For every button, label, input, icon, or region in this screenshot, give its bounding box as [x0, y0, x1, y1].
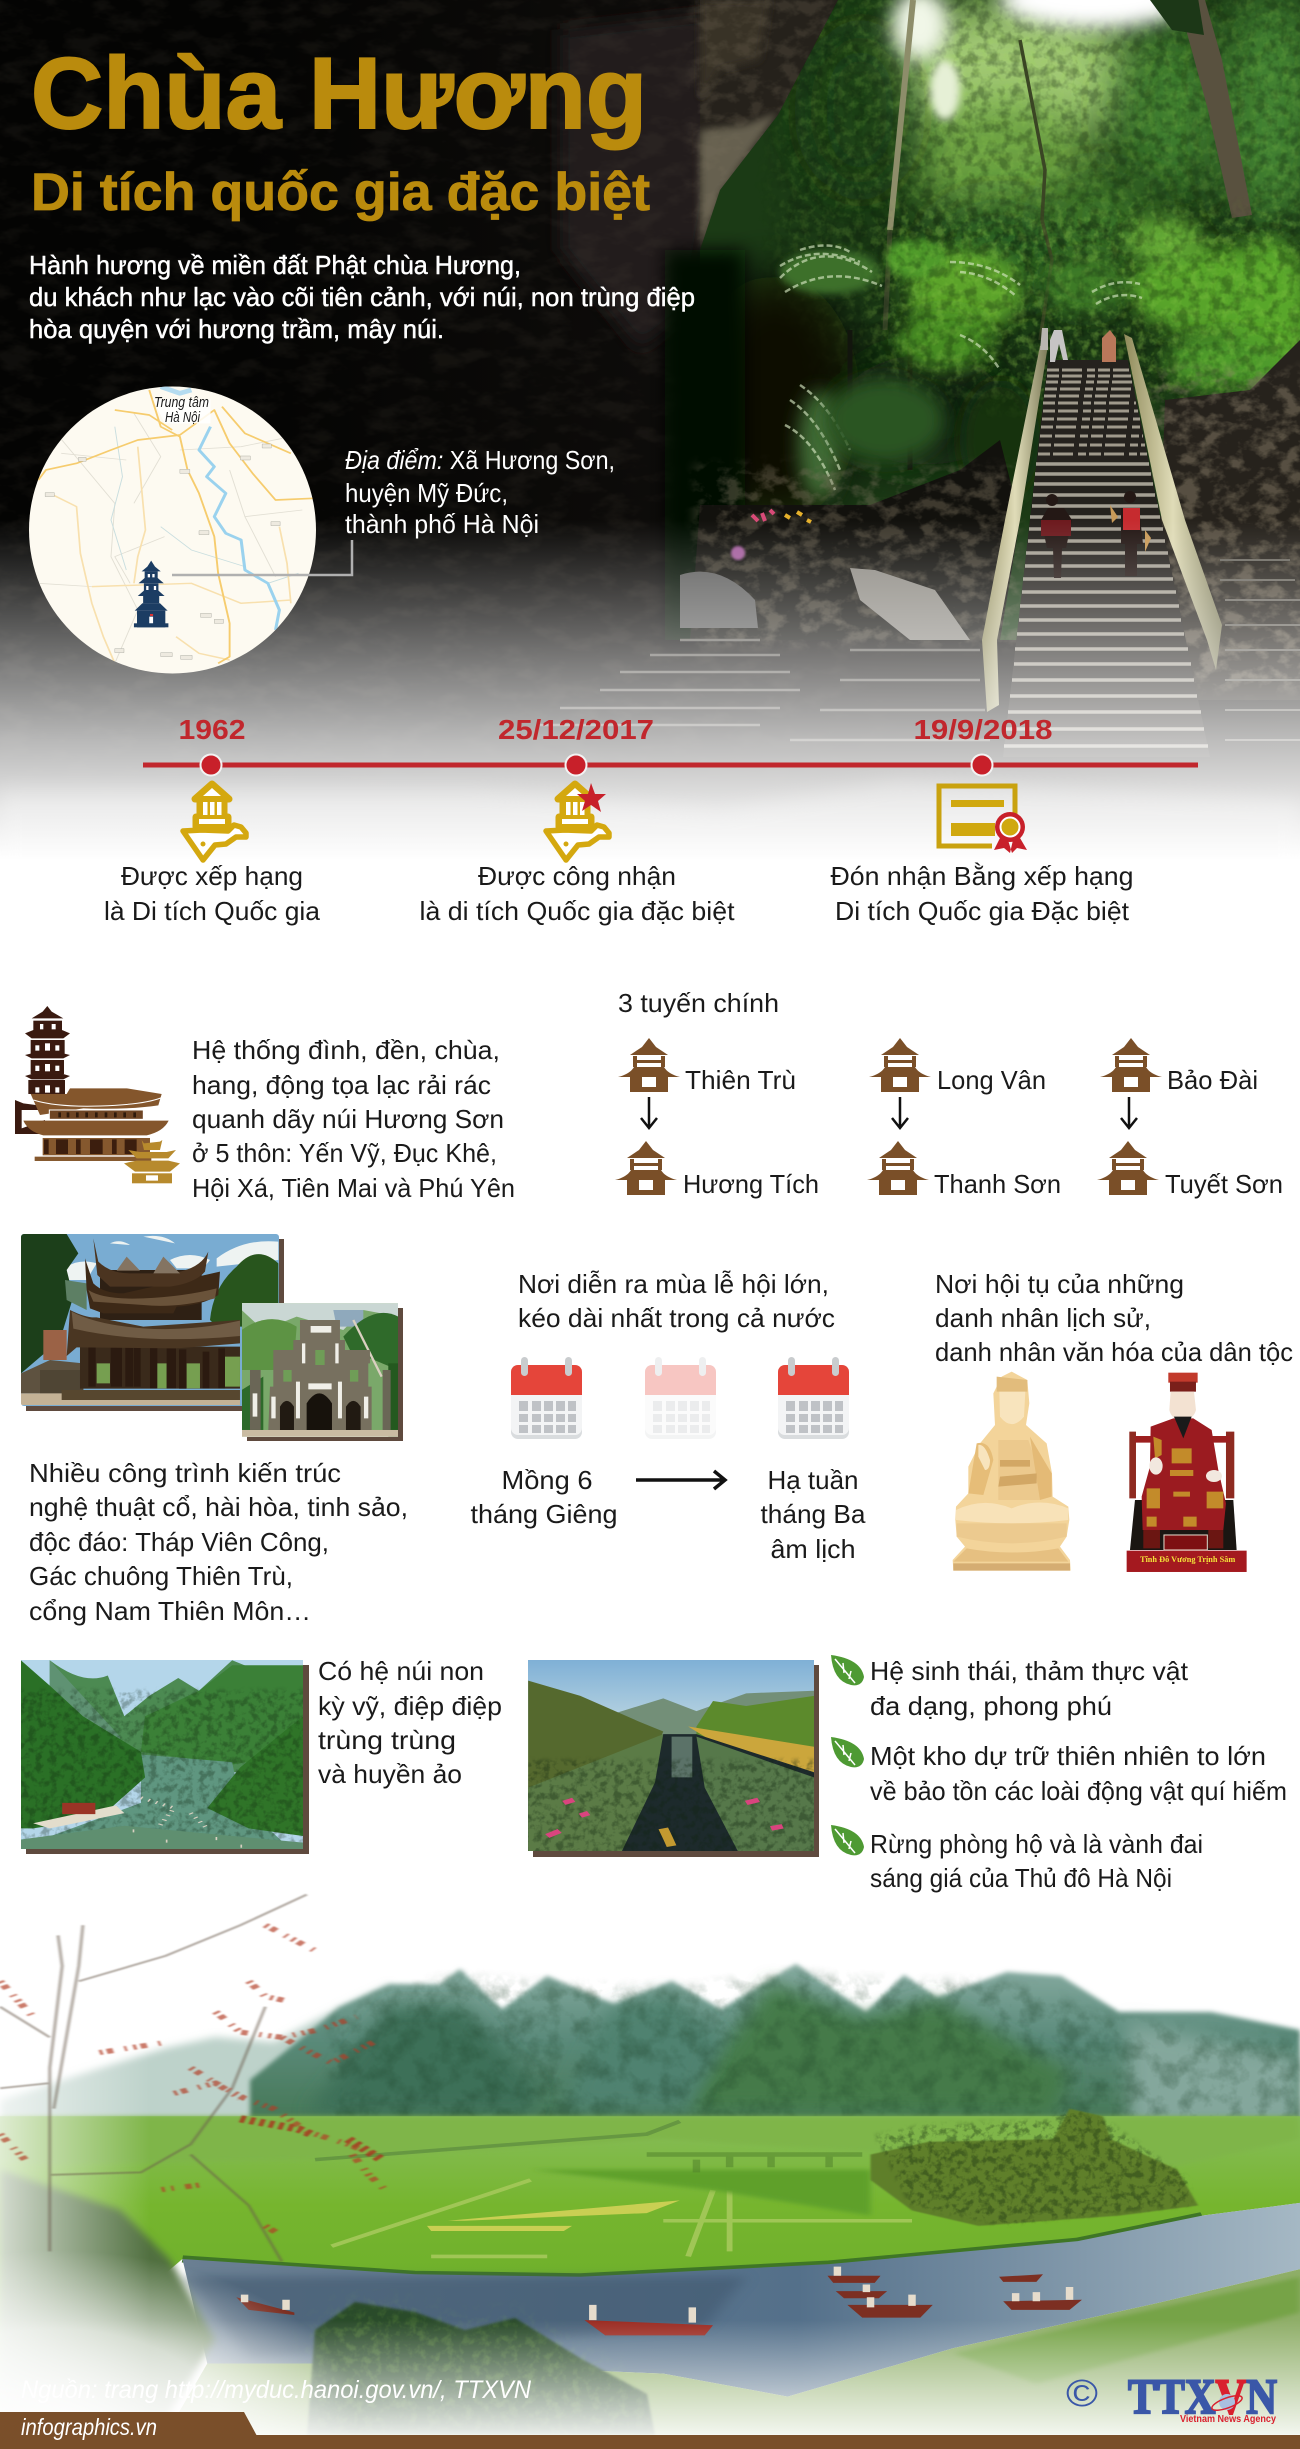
milestone labels: là di tích Quốc gia đặc biệt	[420, 896, 735, 926]
stairway	[1003, 360, 1210, 757]
mountains text: trùng trùng	[318, 1725, 456, 1755]
complex description: Hội Xá, Tiên Mai và Phú Yên	[192, 1173, 515, 1203]
icon: leaf 3	[831, 1825, 864, 1855]
complex description: quanh dãy núi Hương Sơn	[192, 1104, 504, 1134]
icon: small pagoda Thanh Sơn	[867, 1141, 929, 1195]
icon: monument on hand 1962	[183, 784, 246, 860]
hero photo: cave and forest stairway	[0, 0, 1300, 880]
route label: Thiên Trù: Thiên Trù	[685, 1065, 796, 1095]
forest canopy	[680, 0, 1300, 640]
mountains text: Có hệ núi non	[318, 1656, 484, 1686]
arrow from start to end	[636, 1471, 725, 1489]
notable figures text	[935, 1269, 1293, 1367]
photo: Guanyin statue	[953, 1372, 1071, 1571]
photo: Trịnh Sâm statue: Tĩnh Đô Vương Trịnh Sâm	[1140, 1554, 1236, 1564]
logo: TTXVN: Vietnam News Agency	[1180, 2413, 1276, 2425]
start date: Mồng 6	[502, 1465, 592, 1495]
complex description: hang, động tọa lạc rải rác	[192, 1070, 491, 1100]
start date: tháng Giêng	[470, 1499, 618, 1529]
milestone labels: là Di tích Quốc gia	[104, 896, 321, 926]
complex description	[192, 1035, 515, 1203]
festival panel	[470, 1269, 866, 1564]
landscape fades	[0, 1960, 1300, 2440]
end date: âm lịch	[770, 1534, 856, 1564]
rice fields	[0, 2116, 1300, 2414]
icon: monument on hand with star 2017	[546, 783, 609, 860]
complex description: ở 5 thôn: Yến Vỹ, Đục Khê,	[192, 1138, 497, 1168]
timeline: 25/12/2017	[498, 714, 654, 745]
bullet text 3: sáng giá của Thủ đô Hà Nội	[870, 1863, 1172, 1893]
start date	[470, 1465, 618, 1529]
tree island	[871, 2108, 1198, 2226]
mountain ridge	[250, 1964, 1300, 2130]
architecture description	[29, 1458, 408, 1626]
map of Hương Sơn location: Trung tâm	[154, 395, 209, 411]
bullet text 2: về bảo tồn các loài động vật quí hiếm	[870, 1776, 1287, 1806]
mountains text: và huyền ảo	[318, 1759, 462, 1789]
intro text: Hành hương về miền đất Phật chùa Hương,	[29, 250, 521, 280]
bullet text 3: Rừng phòng hộ và là vành đai	[870, 1829, 1203, 1859]
milestone labels: Được công nhận	[478, 861, 676, 891]
footer bar	[0, 2412, 1300, 2449]
milestone labels: Đón nhận Bằng xếp hạng	[830, 861, 1134, 891]
three main routes	[615, 988, 1283, 1199]
architecture description: Nhiều công trình kiến trúc	[29, 1458, 341, 1488]
river	[182, 2203, 1300, 2397]
notable figures text: danh nhân lịch sử,	[935, 1303, 1151, 1333]
icon: calendar middle faded	[645, 1357, 716, 1439]
architecture description: độc đáo: Tháp Viên Công,	[29, 1527, 329, 1557]
bullet text 1	[870, 1656, 1189, 1721]
photo: temple pavilion	[21, 1234, 284, 1411]
intro text: hòa quyện với hương trầm, mây núi.	[29, 314, 444, 344]
route label: Thanh Sơn: Thanh Sơn	[934, 1169, 1061, 1199]
title: Chùa Hương	[31, 38, 647, 150]
bullet text 2: Một kho dự trữ thiên nhiên to lớn	[870, 1741, 1266, 1771]
photo: Trịnh Sâm statue	[1127, 1373, 1247, 1572]
timeline	[143, 714, 1198, 776]
tree ferns	[780, 215, 1300, 500]
icon: certificate with seal	[939, 786, 1027, 853]
icon: leaf 1	[831, 1655, 864, 1685]
ecosystem bullets	[831, 1655, 1287, 1893]
title: Di tích quốc gia đặc biệt	[31, 163, 650, 222]
mountains text	[318, 1656, 502, 1789]
site name: infographics.vn	[21, 2414, 157, 2440]
icon: pagoda marker	[134, 561, 168, 627]
icon: small pagoda Bảo Đài	[1100, 1038, 1162, 1092]
mountains text: kỳ vỹ, điệp điệp	[318, 1691, 502, 1721]
photo: karst mountains and river	[15, 1660, 315, 1854]
architecture description: nghệ thuật cổ, hài hòa, tinh sảo,	[29, 1492, 408, 1522]
milestone labels	[104, 861, 1134, 926]
location text: huyện Mỹ Đức,	[345, 478, 508, 508]
bullet text 1: Hệ sinh thái, thảm thực vật	[870, 1656, 1189, 1686]
icon: small pagoda Thiên Trù	[618, 1038, 680, 1092]
end date: tháng Ba	[760, 1499, 866, 1529]
notable figures text: danh nhân văn hóa của dân tộc	[935, 1337, 1293, 1367]
festival heading: kéo dài nhất trong cả nước	[518, 1303, 835, 1333]
photo: lotus wetland	[520, 1660, 820, 1857]
timeline: 1962	[178, 714, 246, 745]
routes heading: 3 tuyến chính	[618, 988, 779, 1018]
icon: small pagoda Long Vân	[869, 1038, 931, 1092]
end date	[760, 1465, 866, 1564]
complex description: Hệ thống đình, đền, chùa,	[192, 1035, 500, 1065]
icon: small pagoda Hương Tích	[615, 1141, 677, 1195]
bullet text 3	[870, 1829, 1203, 1893]
tree with red blossoms	[0, 1895, 386, 2262]
landscape photo: mountains, rice fields, river	[0, 1895, 1300, 2440]
railings	[982, 334, 1222, 712]
milestone labels: Được xếp hạng	[121, 861, 303, 891]
icon: calendar end	[778, 1357, 849, 1439]
mountain shading	[306, 1983, 1300, 2130]
map of Hương Sơn location	[29, 386, 316, 674]
route label: Bảo Đài: Bảo Đài	[1167, 1065, 1258, 1095]
location text: thành phố Hà Nội	[345, 509, 539, 539]
icon: leaf 2	[831, 1737, 864, 1767]
end date: Hạ tuần	[768, 1465, 858, 1495]
icon: small pagoda Tuyết Sơn	[1097, 1141, 1159, 1195]
bushes	[0, 2170, 655, 2435]
location leader line	[172, 540, 352, 575]
boats	[236, 2267, 1082, 2335]
photo: stone gate	[242, 1303, 403, 1441]
icon: calendar start	[511, 1357, 582, 1439]
timeline: 19/9/2018	[914, 714, 1052, 745]
people on the stairs	[1040, 328, 1151, 578]
bullet text 1: đa dạng, phong phú	[870, 1691, 1112, 1721]
bullet text 2	[870, 1741, 1287, 1806]
location text: Địa điểm: Xã Hương Sơn,	[345, 445, 615, 475]
festival heading: Nơi diễn ra mùa lễ hội lớn,	[518, 1269, 829, 1299]
notable figures text: Nơi hội tụ của những	[935, 1269, 1184, 1299]
architecture description: cổng Nam Thiên Môn…	[29, 1596, 311, 1626]
lower side steps	[540, 560, 1300, 740]
route label: Hương Tích: Hương Tích	[683, 1169, 819, 1199]
source text: Nguồn: trang http://myduc.hanoi.gov.vn/, TTXVN	[21, 2376, 532, 2404]
intro text	[29, 250, 695, 344]
architecture description: Gác chuông Thiên Trù,	[29, 1561, 293, 1591]
icon: pagoda and temple complex	[15, 1006, 180, 1183]
arrows down	[641, 1097, 1137, 1128]
location text	[345, 445, 615, 539]
route label: Long Vân: Long Vân	[937, 1065, 1046, 1095]
festival heading	[518, 1269, 835, 1333]
logo: TTXVN: TTXVN	[1128, 2368, 1277, 2424]
map of Hương Sơn location: Hà Nội	[165, 410, 201, 426]
copyright symbol: ©	[1066, 2373, 1098, 2415]
milestone labels: Di tích Quốc gia Đặc biệt	[835, 896, 1130, 926]
flowers	[731, 510, 811, 560]
intro text: du khách như lạc vào cõi tiên cảnh, với núi, non trùng điệp	[29, 282, 695, 312]
title	[31, 38, 650, 222]
far hazy mountains	[0, 1984, 390, 2126]
route label: Tuyết Sơn: Tuyết Sơn	[1165, 1169, 1283, 1199]
tree trunks	[850, 0, 1252, 470]
fade to white	[0, 520, 1300, 880]
lower bank	[166, 2269, 1300, 2435]
rocks	[680, 340, 1300, 700]
